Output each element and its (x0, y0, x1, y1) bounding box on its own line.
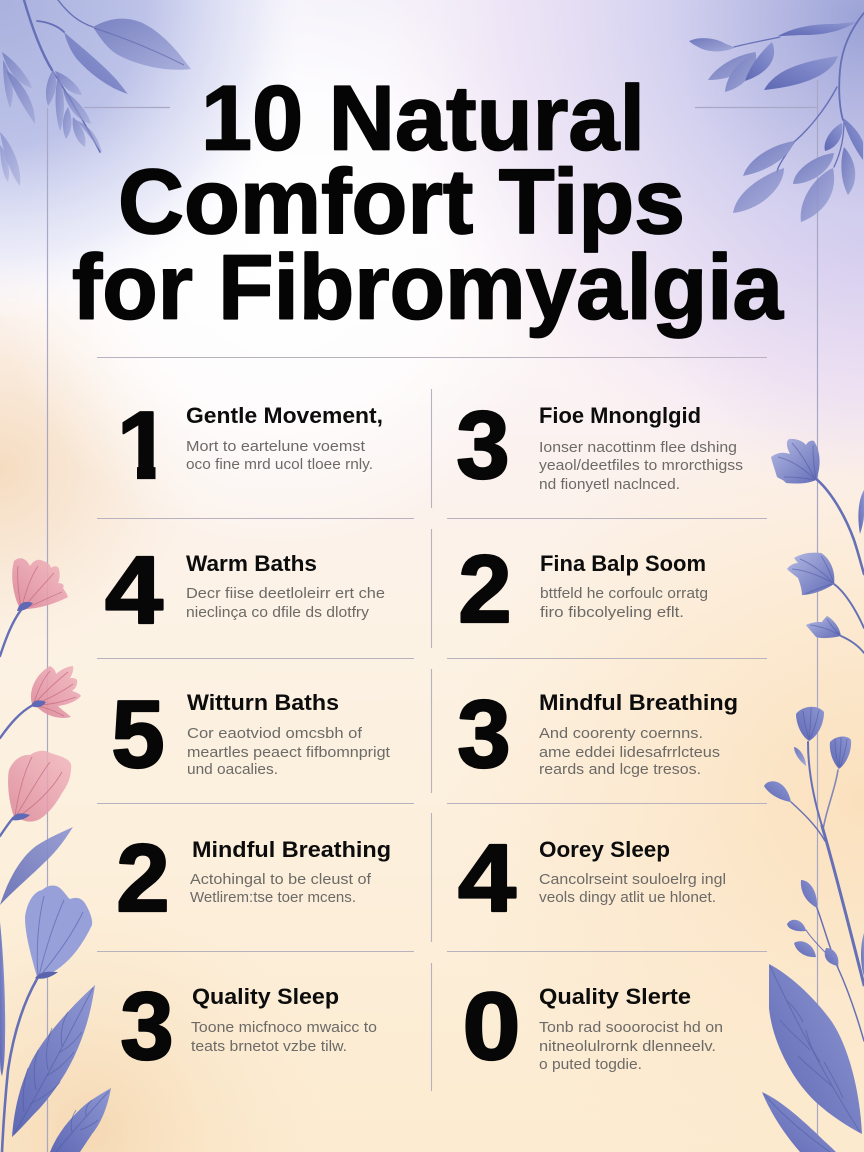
number 4: 4 (458, 825, 516, 932)
tip: Fioe Mnonglgid (456, 392, 743, 499)
heading: Warm Baths (186, 551, 317, 576)
big leaf (12, 985, 95, 1137)
tip: Mindful Breathing (right) (457, 681, 738, 788)
description (186, 585, 385, 621)
description: nd fionyetl naclnced. (539, 476, 680, 493)
heading: Mindful Breathing (192, 837, 391, 862)
heading: Oorey Sleep (539, 837, 670, 862)
illustration: top-right leaves (689, 13, 864, 222)
description: ame eddei lidesafrrlcteus (539, 744, 720, 761)
number 2: 2 (116, 825, 170, 932)
divider lines (97, 358, 767, 1091)
pink flower 2 (31, 666, 81, 718)
description (539, 1019, 723, 1073)
heading: Gentle Movement, (186, 403, 383, 428)
tip: Oorey Sleep (458, 825, 726, 932)
flower 2 (787, 553, 834, 595)
small leaf (762, 1092, 836, 1152)
description (186, 438, 373, 473)
description: Wetlirem:tse toer mcens. (190, 889, 356, 906)
tip: Warm Baths (105, 537, 385, 644)
tip: Fina Balp Soom (458, 536, 708, 643)
heading: Quality Sleep (192, 984, 339, 1009)
heading: Fina Balp Soom (540, 551, 706, 576)
number 5: 5 (111, 681, 165, 788)
buds (764, 707, 851, 966)
flower 3 (806, 616, 841, 638)
description: bttfeld he corfoulc orratg (540, 585, 708, 602)
description: reards and lcge tresos. (539, 761, 701, 778)
tip: Mindful Breathing (left) (116, 825, 391, 932)
description (539, 439, 743, 493)
description: oco fine mrd ucol tloee rnly. (186, 456, 373, 473)
large leaf (769, 964, 862, 1134)
illustration: right blue flowers and leaves (762, 439, 864, 1152)
description: Ionser nacottinm flee dshing (539, 439, 737, 456)
tip: Gentle Movement (122, 407, 382, 480)
description: und oacalies. (187, 761, 278, 778)
heading: Witturn Baths (187, 690, 339, 715)
number 1: 1 (117, 392, 170, 499)
description (539, 725, 720, 778)
illustration: left pink and blue flowers (0, 558, 111, 1152)
description: Mort to eartelune voemst (186, 438, 366, 455)
number 0: 0 (462, 973, 520, 1080)
number 3: 3 (457, 681, 511, 788)
description: veols dingy atlit ue hlonet. (539, 889, 716, 906)
description: Cancolrseint souloelrg ingl (539, 871, 726, 888)
description: nieclinça co dfile ds dlotfry (186, 604, 370, 621)
description (539, 871, 726, 906)
tip: Witturn Baths (111, 681, 391, 788)
number 4: 4 (105, 537, 163, 644)
description: nitneolulrornk dlenneelv. (539, 1038, 716, 1055)
description: Decr fiise deetloleirr ert che (186, 585, 385, 602)
pink flower 1 (12, 558, 68, 611)
number 3: 3 (120, 973, 174, 1080)
description: firo fibcolyeling eflt. (540, 604, 684, 621)
description (190, 871, 372, 906)
description: yeaol/deetfiles to mrorcthigss (539, 457, 743, 474)
blue tulip (25, 886, 92, 979)
title: for Fibromyalgia (72, 236, 784, 338)
description: And coorenty coernns. (539, 725, 703, 742)
number 2: 2 (458, 536, 512, 643)
description: teats brnetot vzbe tilw. (191, 1038, 347, 1055)
description: Cor eaotviod omcsbh of (187, 725, 363, 742)
small leaf (50, 1088, 111, 1152)
description (540, 585, 708, 621)
blue leaf (0, 827, 73, 905)
title (72, 68, 784, 338)
description (191, 1019, 377, 1055)
heading: Fioe Mnonglgid (539, 403, 701, 428)
description: Tonb rad sooorocist hd on (539, 1019, 723, 1036)
illustration: top-left leaves (0, 0, 191, 186)
heading: Mindful Breathing (539, 690, 738, 715)
title: Comfort Tips (118, 151, 685, 253)
heading: Quality Slerte (539, 984, 691, 1009)
flower cluster top (771, 439, 820, 484)
description: o puted togdie. (539, 1056, 642, 1073)
description: Toone micfnoco mwaicc to (191, 1019, 377, 1036)
number 3: 3 (456, 392, 510, 499)
title: 10 Natural (201, 68, 645, 170)
description (187, 725, 391, 778)
tip: Quality Slerte (462, 973, 723, 1080)
tip: Quality Sleep (120, 973, 377, 1080)
description: Actohingal to be cleust of (190, 871, 372, 888)
pink flower 3 (8, 751, 71, 822)
description: meartles peaect fifbomnprigt (187, 744, 391, 761)
